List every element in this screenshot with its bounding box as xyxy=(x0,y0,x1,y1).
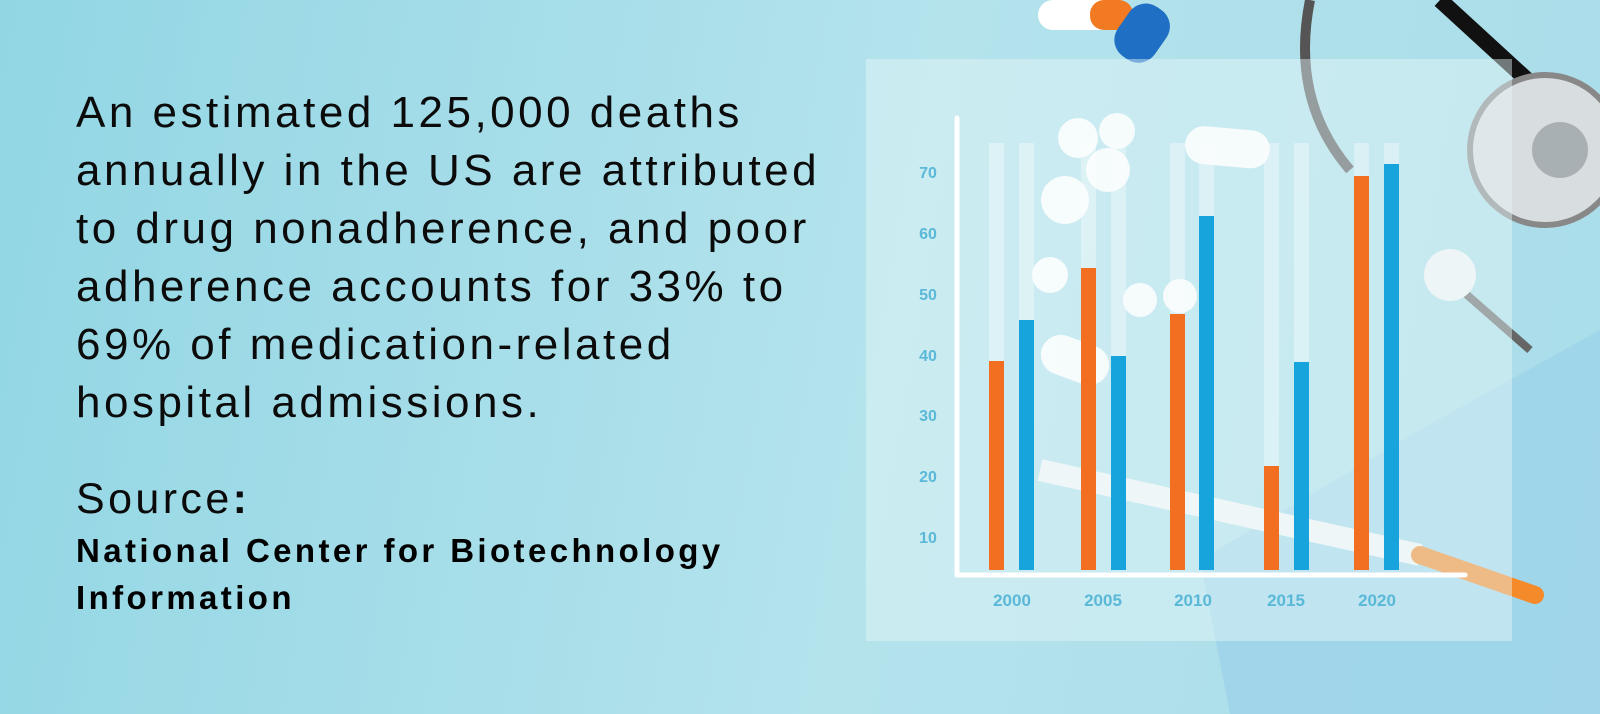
icon: mask xyxy=(1200,330,1600,714)
x labels: 2010 xyxy=(1174,591,1212,610)
icon: capsules xyxy=(1038,0,1178,71)
main text: to drug nonadherence, and poor xyxy=(76,204,810,253)
main text: annually in the US are attributed xyxy=(76,146,820,195)
main text xyxy=(76,88,820,427)
bars blue xyxy=(1019,164,1399,570)
source name xyxy=(76,532,724,616)
x labels: 2000 xyxy=(993,591,1031,610)
y labels: 70 xyxy=(919,165,937,182)
y labels: 10 xyxy=(919,530,937,547)
main text: 69% of medication-related xyxy=(76,320,675,369)
main text: hospital admissions. xyxy=(76,378,542,427)
x labels: 2015 xyxy=(1267,591,1305,610)
y labels: 60 xyxy=(919,226,937,243)
icon: syringe xyxy=(1040,470,1535,595)
bars orange xyxy=(989,176,1369,570)
axes xyxy=(957,118,1465,575)
y labels: 20 xyxy=(919,469,937,486)
y labels: 30 xyxy=(919,408,937,425)
x labels: 2020 xyxy=(1358,591,1396,610)
track bars xyxy=(989,143,1399,570)
pills xyxy=(1032,113,1271,391)
y labels: 50 xyxy=(919,287,937,304)
source label: Source: xyxy=(76,475,250,523)
main text: An estimated 125,000 deaths xyxy=(76,88,743,137)
y labels: 40 xyxy=(919,348,937,365)
source name: Information xyxy=(76,579,295,616)
main text: adherence accounts for 33% to xyxy=(76,262,787,311)
icon: stethoscope xyxy=(1305,0,1600,350)
x labels xyxy=(993,591,1396,610)
y labels xyxy=(919,165,937,547)
source name: National Center for Biotechnology xyxy=(76,532,724,569)
x labels: 2005 xyxy=(1084,591,1122,610)
chart panel xyxy=(866,59,1512,641)
